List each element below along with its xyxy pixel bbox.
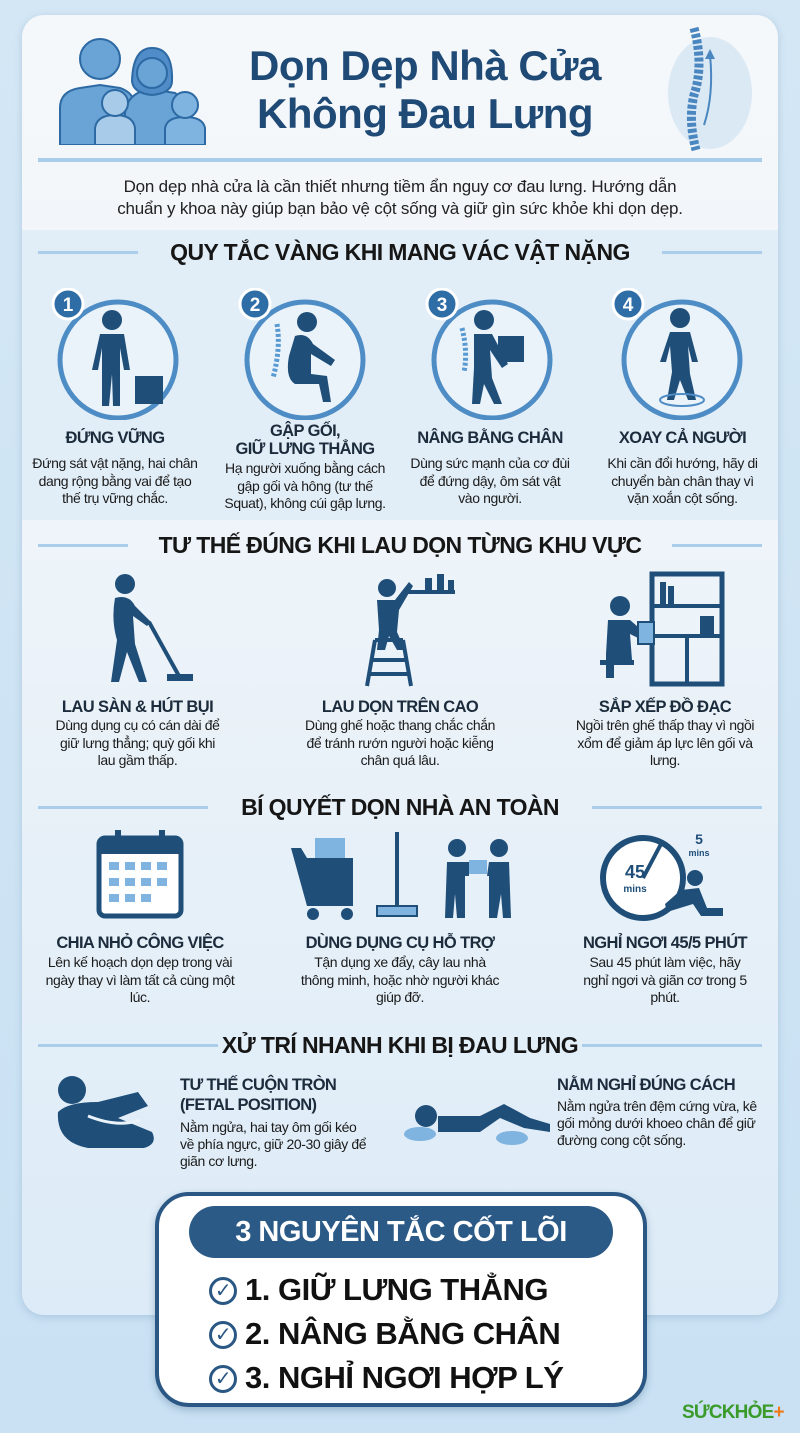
list of principles [209, 1272, 564, 1395]
text: lying down [557, 1075, 757, 1148]
list of principles: ✓ [215, 1324, 231, 1346]
title: Dọn Dẹp Nhà Cửa [249, 42, 601, 89]
panel: rule 4: XOAY CẢ NGƯỜI [619, 429, 746, 447]
panel: split tasks: CHIA NHỎ CÔNG VIỆC [56, 934, 224, 952]
panel: rest 45/5: Sau 45 phút làm việc, hãy nghỉ ngơi và giãn cơ trong 5 phút. [583, 954, 747, 1005]
title [249, 42, 602, 137]
panel: rule 2: GIỮ LƯNG THẲNG [235, 440, 375, 458]
panel: high cleaning [305, 574, 495, 768]
callout heading [189, 1206, 613, 1258]
panel: split tasks [46, 830, 235, 1005]
list of principles: 2. NÂNG BẰNG CHÂN [245, 1316, 560, 1351]
panel: floor cleaning: Dùng dụng cụ có cán dài để giữ lưng thẳng; quỳ gối khi lau gầm thấp. [56, 717, 219, 768]
panel: floor cleaning [56, 574, 220, 768]
list of principles: 1. GIỮ LƯNG THẲNG [245, 1272, 548, 1307]
panel: rest 45/5: mins [688, 848, 710, 858]
panel: tools [291, 832, 511, 1005]
panel: rule 3: NÂNG BẰNG CHÂN [417, 429, 563, 447]
heading: section 4: XỬ TRÍ NHANH KHI BỊ ĐAU LƯNG [222, 1032, 578, 1058]
panel: rule 4 [607, 288, 758, 506]
panel: rule 3: 3 [437, 295, 447, 316]
panel: rule 2: 2 [250, 295, 260, 316]
panel: rule 4: 4 [623, 295, 634, 316]
callout heading: 3 NGUYÊN TẮC CỐT LÕI [235, 1216, 567, 1248]
intro text [117, 177, 683, 218]
panel: rule 3 [410, 288, 570, 506]
text: fetal position: (FETAL POSITION) [180, 1096, 316, 1114]
panel: rest 45/5 [583, 831, 748, 1005]
logo: SỨCKHỎE+ [682, 1402, 784, 1423]
panel: high cleaning: LAU DỌN TRÊN CAO [322, 698, 478, 716]
panel: rest 45/5: NGHỈ NGƠI 45/5 PHÚT [583, 934, 747, 952]
panel: rule 1 [32, 288, 198, 506]
text: fetal position [180, 1074, 366, 1169]
panel: rule 2 [224, 288, 386, 511]
icon: spine [668, 26, 752, 152]
intro text: chuẩn y khoa này giúp bạn bảo vệ cột sống và giữ gìn sức khỏe khi dọn dẹp. [117, 199, 683, 218]
list of principles: ✓ [215, 1368, 231, 1390]
list of principles: 3. NGHỈ NGƠI HỢP LÝ [245, 1360, 563, 1395]
panel: arranging: Ngồi trên ghế thấp thay vì ngồi xổm để giảm áp lực lên gối và lưng. [576, 717, 754, 768]
header: family icon [59, 38, 206, 145]
text: fetal position: Nằm ngửa, hai tay ôm gối kéo về phía ngực, giữ 20-30 giây để giãn cơ lưng. [180, 1119, 366, 1169]
panel: rule 3: Dùng sức mạnh của cơ đùi để đứng dậy, ôm sát vật vào người. [410, 455, 570, 506]
heading: section 3: BÍ QUYẾT DỌN NHÀ AN TOÀN [241, 794, 559, 820]
panel: floor cleaning: LAU SÀN & HÚT BỤI [62, 698, 213, 716]
title: Không Đau Lưng [257, 90, 593, 137]
panel: tools: Tận dụng xe đẩy, cây lau nhà thông minh, hoặc nhờ người khác giúp đỡ. [301, 954, 499, 1005]
icon: fetal position [58, 1076, 154, 1148]
panel: split tasks: Lên kế hoạch dọn dẹp trong vài ngày thay vì làm tất cả cùng một lúc. [46, 954, 234, 1005]
heading: section 2: TƯ THẾ ĐÚNG KHI LAU DỌN TỪNG KHU VỰC [159, 532, 641, 558]
panel: rest 45/5: mins [623, 884, 647, 895]
panel: tools: DÙNG DỤNG CỤ HỖ TRỢ [306, 934, 494, 952]
panel: rule 1: Đứng sát vật nặng, hai chân dang rộng bằng vai để tạo thế trụ vững chắc. [32, 455, 198, 506]
callout: 3 core principles [155, 1192, 647, 1407]
text: fetal position: TƯ THẾ CUỘN TRÒN [180, 1076, 336, 1094]
text: lying down: NẰM NGHỈ ĐÚNG CÁCH [557, 1076, 735, 1094]
icon: lying down [404, 1104, 550, 1145]
panel: rule 2: GẬP GỐI, [270, 422, 340, 440]
list of principles: ✓ [215, 1280, 231, 1302]
panel: arranging [576, 572, 754, 768]
panel: rest 45/5: 45 [625, 862, 645, 882]
panel: arranging: SẮP XẾP ĐỒ ĐẠC [599, 698, 731, 716]
heading: section 1: QUY TẮC VÀNG KHI MANG VÁC VẬT NẶNG [170, 239, 630, 265]
panel: rule 1: ĐỨNG VỮNG [66, 429, 164, 447]
panel: high cleaning: Dùng ghế hoặc thang chắc chắn để tránh rướn người hoặc kiễng chân quá lâu. [305, 717, 495, 768]
panel: rule 4: Khi cần đổi hướng, hãy di chuyển bàn chân thay vì vặn xoắn cột sống. [607, 455, 758, 506]
panel: rest 45/5: 5 [695, 831, 703, 847]
intro text: Dọn dẹp nhà cửa là cần thiết nhưng tiềm ẩn nguy cơ đau lưng. Hướng dẫn [124, 177, 676, 196]
panel: rule 1: 1 [63, 295, 74, 316]
panel: rule 2: Hạ người xuống bằng cách gập gối và hông (tư thế Squat), không cúi gập lưng. [224, 460, 386, 511]
text: lying down: Nằm ngửa trên đệm cứng vừa, kê gối mỏng dưới khoeo chân để giữ đường cong cột sống. [557, 1098, 757, 1148]
